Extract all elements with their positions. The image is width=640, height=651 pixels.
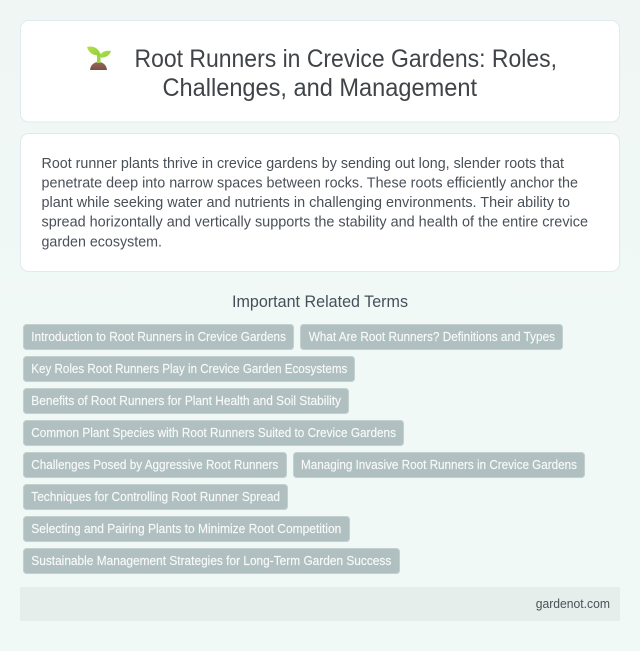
text block: description: penetrate deep into narrow spaces between rocks. These roots efficiently anchor the bbox=[42, 174, 578, 192]
tag: benefits bbox=[24, 388, 348, 414]
icon: sprout bbox=[87, 47, 111, 70]
text block: description: plant while seeking water and nutrients in challenging environments. Their ability to bbox=[42, 194, 570, 211]
tag: techniques: Techniques for Controlling Root Runner Spread bbox=[31, 489, 280, 504]
panel: description bbox=[20, 134, 620, 272]
tag: introduction: Introduction to Root Runners in Crevice Gardens bbox=[31, 329, 286, 344]
title: Root Runners in Crevice Gardens: Roles, bbox=[134, 45, 557, 73]
tag: key roles: Key Roles Root Runners Play in Crevice Garden Ecosystems bbox=[31, 361, 348, 376]
footer text: gardenot.com bbox=[536, 596, 610, 611]
tag: challenges bbox=[24, 452, 286, 478]
tag: what are root runners: What Are Root Runners? Definitions and Types bbox=[309, 329, 555, 344]
title bbox=[134, 45, 557, 102]
text block: description: garden ecosystem. bbox=[42, 234, 162, 250]
tag: selecting and pairing bbox=[24, 516, 350, 542]
tag: managing invasive bbox=[294, 452, 584, 478]
tag: benefits: Benefits of Root Runners for Plant Health and Soil Stability bbox=[31, 393, 341, 408]
tag: key roles bbox=[24, 356, 354, 382]
tag: introduction bbox=[24, 324, 294, 350]
tag: techniques bbox=[24, 484, 288, 510]
tag: common species: Common Plant Species with Root Runners Suited to Crevice Gardens bbox=[31, 425, 396, 440]
panel: related term tags bbox=[24, 324, 584, 574]
heading: important related terms: Important Related Terms bbox=[232, 293, 408, 311]
tag: selecting and pairing: Selecting and Pairing Plants to Minimize Root Competition bbox=[31, 521, 341, 536]
tag: challenges: Challenges Posed by Aggressive Root Runners bbox=[31, 457, 279, 472]
tag: sustainable management: Sustainable Management Strategies for Long-Term Garden Success bbox=[31, 553, 392, 568]
title: Challenges, and Management bbox=[162, 74, 477, 102]
tag: managing invasive: Managing Invasive Root Runners in Crevice Gardens bbox=[301, 457, 577, 472]
text block: description: Root runner plants thrive in crevice gardens by sending out long, slender roots that bbox=[42, 155, 565, 172]
text block: description: spread horizontally and vertically supports the stability and health of the entire crevice bbox=[42, 214, 588, 231]
footer bbox=[20, 587, 620, 621]
tag: common species bbox=[24, 420, 404, 446]
tag: sustainable management bbox=[24, 548, 400, 574]
text block: description bbox=[42, 155, 588, 250]
tag: what are root runners bbox=[300, 324, 562, 350]
panel: title header bbox=[20, 20, 620, 122]
